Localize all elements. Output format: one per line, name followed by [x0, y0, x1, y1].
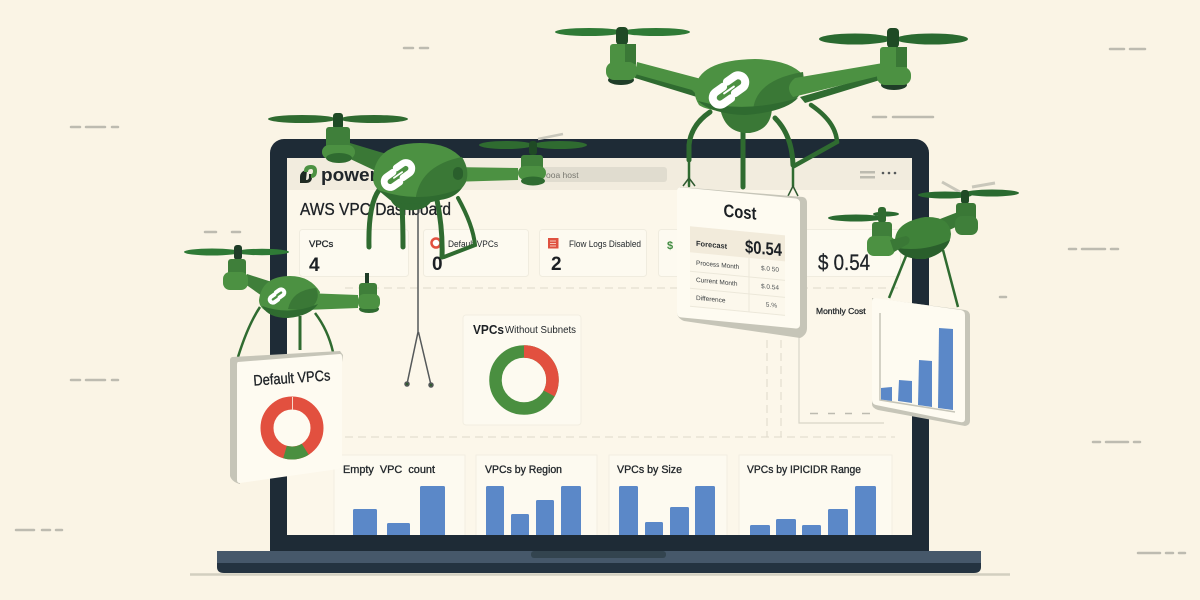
panel: VPCs by Region	[476, 455, 597, 540]
panel: VPCs by IP/CIDR Range: VPCs by IPICIDR Range	[747, 464, 861, 476]
drone logo	[709, 73, 749, 107]
panel: VPCs by Region: VPCs by Region	[485, 464, 562, 476]
panel: VPCs Without Subnets: Without Subnets	[505, 325, 576, 336]
cost table: Forecast	[696, 239, 728, 251]
power logo: power	[321, 165, 377, 185]
KPI card: Flow Logs Disabled: Flow Logs Disabled	[569, 239, 641, 249]
KPI card: VPCs: 4	[309, 255, 320, 276]
KPI card: Default VPCs	[424, 230, 528, 276]
KPI card: cost: $	[667, 240, 673, 252]
drone motors	[223, 259, 380, 313]
cost table: Current Month	[696, 277, 738, 288]
drone arms	[635, 62, 705, 98]
bar chart	[880, 313, 955, 412]
KPI card: Default VPCs: 0	[432, 254, 443, 275]
drone motors	[606, 44, 911, 90]
KPI card: Flow Logs Disabled: 2	[551, 254, 562, 275]
dashboard header	[287, 158, 912, 190]
bezel bottom cover	[270, 535, 929, 551]
drone logo	[381, 160, 415, 190]
power logo	[300, 165, 377, 185]
KPI card: cost: $ 0.54	[818, 250, 870, 275]
KPI card: cost	[658, 230, 900, 276]
drone rotor	[184, 245, 289, 260]
cost table	[690, 226, 785, 315]
header menu icons	[860, 171, 896, 178]
drone belly	[388, 193, 435, 210]
KPI card: VPCs: VPCs	[309, 239, 334, 250]
KPI card: Default VPCs: Default VPCs	[448, 239, 498, 249]
KPI card: VPCs	[300, 230, 408, 276]
laptop	[190, 139, 1010, 574]
drone rotor blurred blades	[942, 182, 995, 192]
panel: VPCs Without Subnets: VPCs	[473, 323, 504, 337]
dashboard title: AWS VPC Dashboard	[300, 199, 451, 219]
drone motors	[867, 203, 978, 256]
drone rotor left	[555, 27, 690, 45]
cost table: $.0 50	[761, 265, 779, 274]
drone legs	[238, 307, 333, 357]
panel face	[237, 354, 342, 483]
drone rotor right	[819, 28, 968, 48]
hanging panel: Cost	[677, 187, 807, 338]
cost heading: Cost	[723, 201, 756, 224]
drone rotor right	[479, 134, 587, 155]
drone arms	[346, 143, 390, 173]
cost table: Process Month	[696, 260, 740, 271]
panel: VPCs by Size	[609, 455, 727, 540]
drone: top large	[555, 27, 968, 196]
drone body	[259, 276, 320, 318]
drone: middle, with tether	[268, 113, 587, 387]
cost table: $.0.54	[761, 283, 779, 292]
drone rotor right	[918, 190, 1019, 204]
panel: Empty VPC count	[334, 455, 465, 540]
laptop bezel	[270, 139, 929, 551]
panel: VPCs Without Subnets	[463, 315, 581, 425]
drone: left small	[184, 245, 380, 357]
drone feet	[683, 178, 798, 196]
donut chart: subnets	[496, 352, 552, 408]
search bar	[530, 167, 667, 182]
drone body	[895, 217, 951, 259]
panel edge	[230, 351, 343, 484]
drone legs	[889, 250, 958, 307]
drone rotor left	[828, 207, 899, 223]
drone body	[695, 59, 883, 115]
drone: right small	[828, 182, 1019, 307]
drone belly	[720, 108, 772, 133]
drone arm	[940, 212, 958, 232]
panel: VPCs by IP/CIDR Range	[739, 455, 892, 540]
donut chart: default VPCs	[258, 394, 326, 462]
hanging panel: monthly cost chart	[872, 298, 970, 426]
panel heading: Default VPCs	[253, 367, 331, 390]
cost table: Difference	[696, 295, 726, 305]
cost table: $0.54	[745, 237, 782, 260]
drone legs	[369, 190, 475, 257]
hanging panel: Default VPCs	[230, 351, 343, 484]
drone motors	[322, 127, 546, 186]
laptop screen	[287, 158, 912, 535]
cost table: 5.%	[766, 302, 777, 310]
drone body	[373, 143, 467, 204]
tether	[405, 205, 433, 387]
drone rotor left	[268, 113, 408, 129]
search bar: ooa host	[546, 170, 579, 180]
panel face	[677, 187, 800, 329]
drone legs	[689, 105, 837, 187]
drone logo	[268, 288, 286, 304]
monthly cost label: Monthly Cost	[816, 306, 866, 316]
KPI card: Flow Logs Disabled	[540, 230, 646, 276]
panel face	[872, 298, 965, 422]
panel: VPCs by Size: VPCs by Size	[617, 464, 682, 476]
laptop base	[190, 551, 1010, 574]
panel shadow	[677, 187, 807, 338]
panel: Empty VPC count: Empty VPC count	[343, 464, 435, 476]
drone arm	[245, 274, 275, 296]
